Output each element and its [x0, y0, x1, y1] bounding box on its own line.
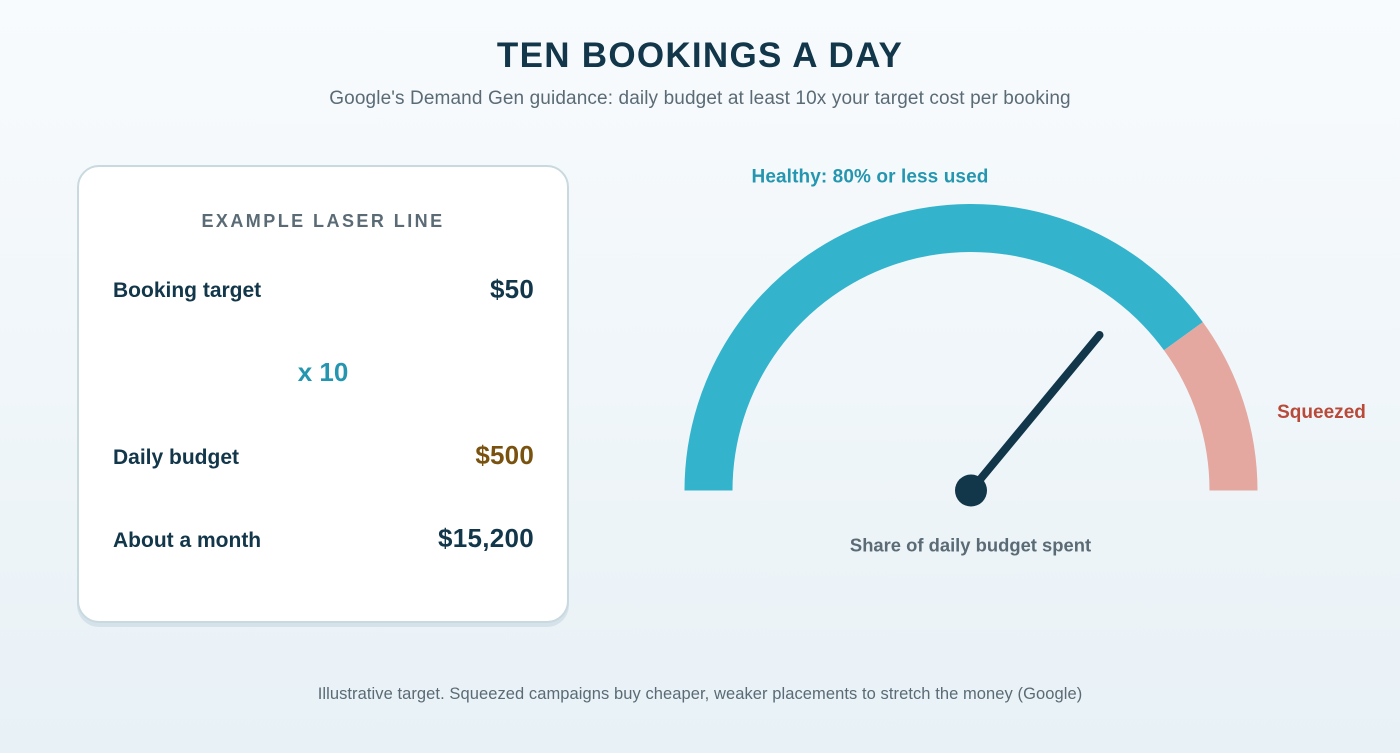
- row label: daily budget: Daily budget: [113, 446, 239, 469]
- row value: $50: $50: [490, 274, 534, 304]
- gauge caption: Share of daily budget spent: [850, 534, 1091, 556]
- title: TEN BOOKINGS A DAY: [497, 36, 903, 75]
- row value: $500: $500: [475, 440, 534, 470]
- gauge arc: healthy zone: [708, 228, 1183, 490]
- footnote: Illustrative target. Squeezed campaigns buy cheaper, weaker placements to stretch the money (Google): [318, 685, 1082, 703]
- subtitle: Google's Demand Gen guidance: daily budget at least 10x your target cost per booking: [329, 88, 1071, 109]
- multiplier: x 10: [298, 357, 348, 387]
- gauge arc: squeezed zone: [1183, 336, 1234, 490]
- panel heading: EXAMPLE LASER LINE: [201, 211, 445, 231]
- row label: about a month: About a month: [113, 529, 261, 552]
- needle: [955, 335, 1100, 506]
- row label: booking target: Booking target: [113, 279, 261, 302]
- label: healthy: Healthy: 80% or less used: [752, 166, 988, 188]
- row value: $15,200: $15,200: [438, 523, 534, 553]
- panel: example laser line: [77, 165, 569, 623]
- label: squeezed: Squeezed: [1277, 402, 1366, 423]
